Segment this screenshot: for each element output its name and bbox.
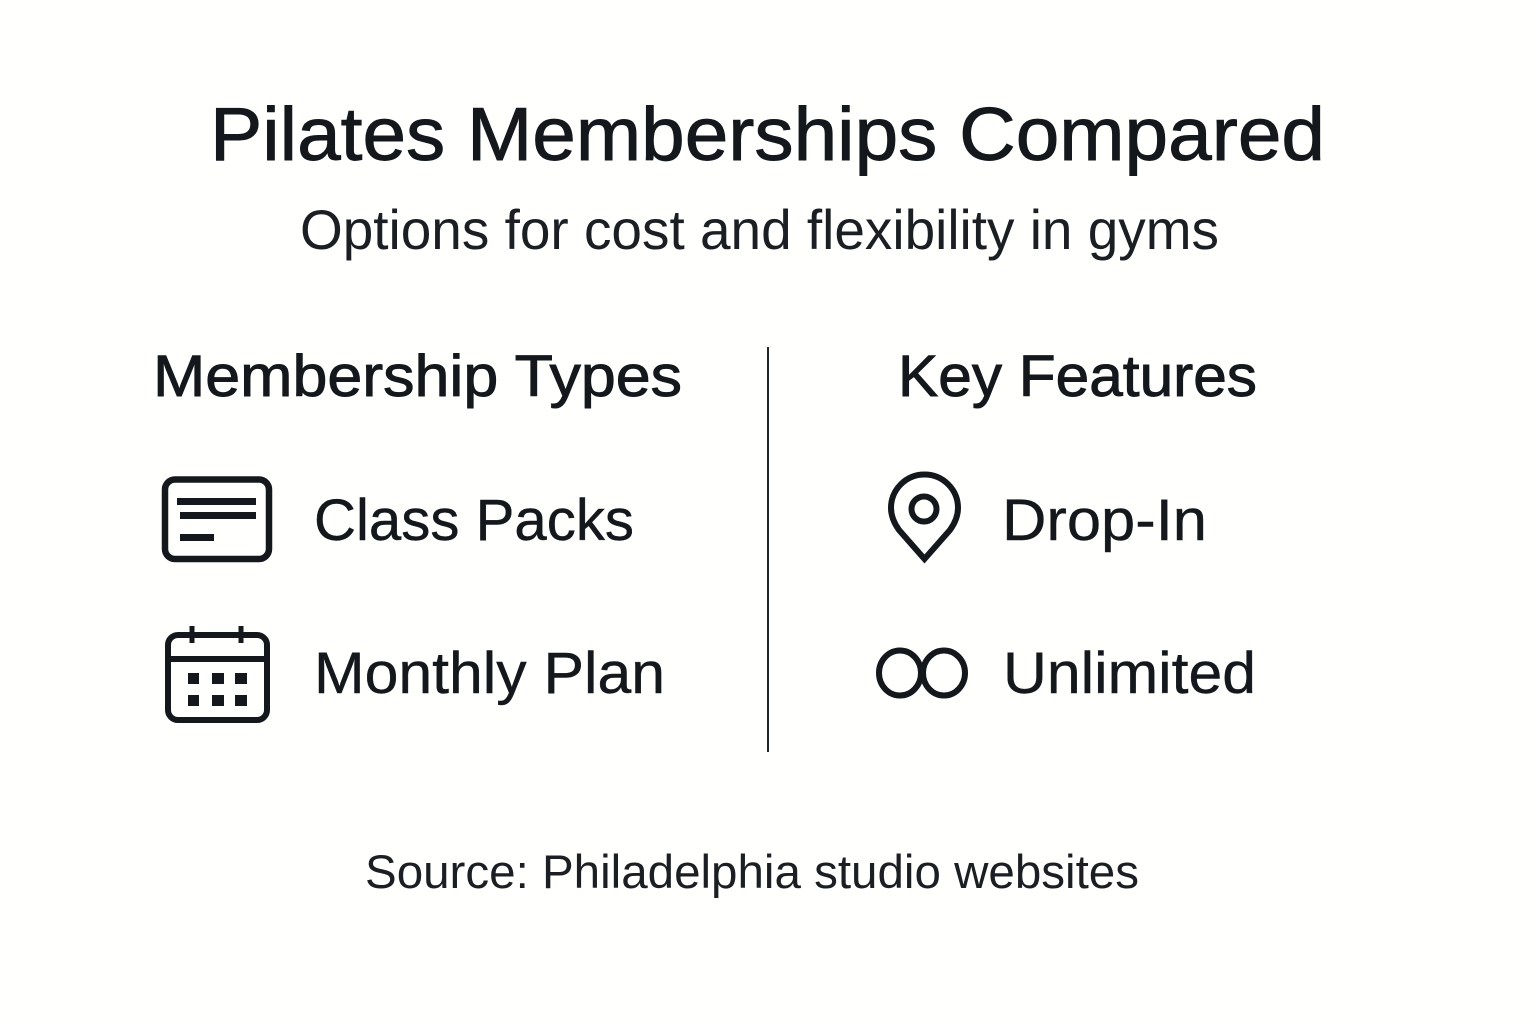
panel: key features [879, 344, 1257, 706]
label: unlimited: Unlimited [1003, 641, 1256, 706]
heading: key features: Key Features [898, 344, 1257, 409]
icon: class pack card [165, 480, 269, 559]
icon: infinity loops [879, 650, 965, 696]
icon: calendar [168, 626, 267, 720]
label: class packs: Class Packs [314, 488, 634, 553]
source note: Source: Philadelphia studio websites [365, 845, 1139, 898]
label: drop-in: Drop-In [1002, 488, 1207, 553]
label: monthly plan: Monthly Plan [314, 641, 665, 706]
subtitle: Options for cost and flexibility in gyms [300, 198, 1219, 261]
panel: membership types [153, 344, 682, 720]
icon: location pin [891, 474, 958, 559]
heading: membership types: Membership Types [153, 344, 682, 409]
title: Pilates Memberships Compared [210, 92, 1325, 176]
